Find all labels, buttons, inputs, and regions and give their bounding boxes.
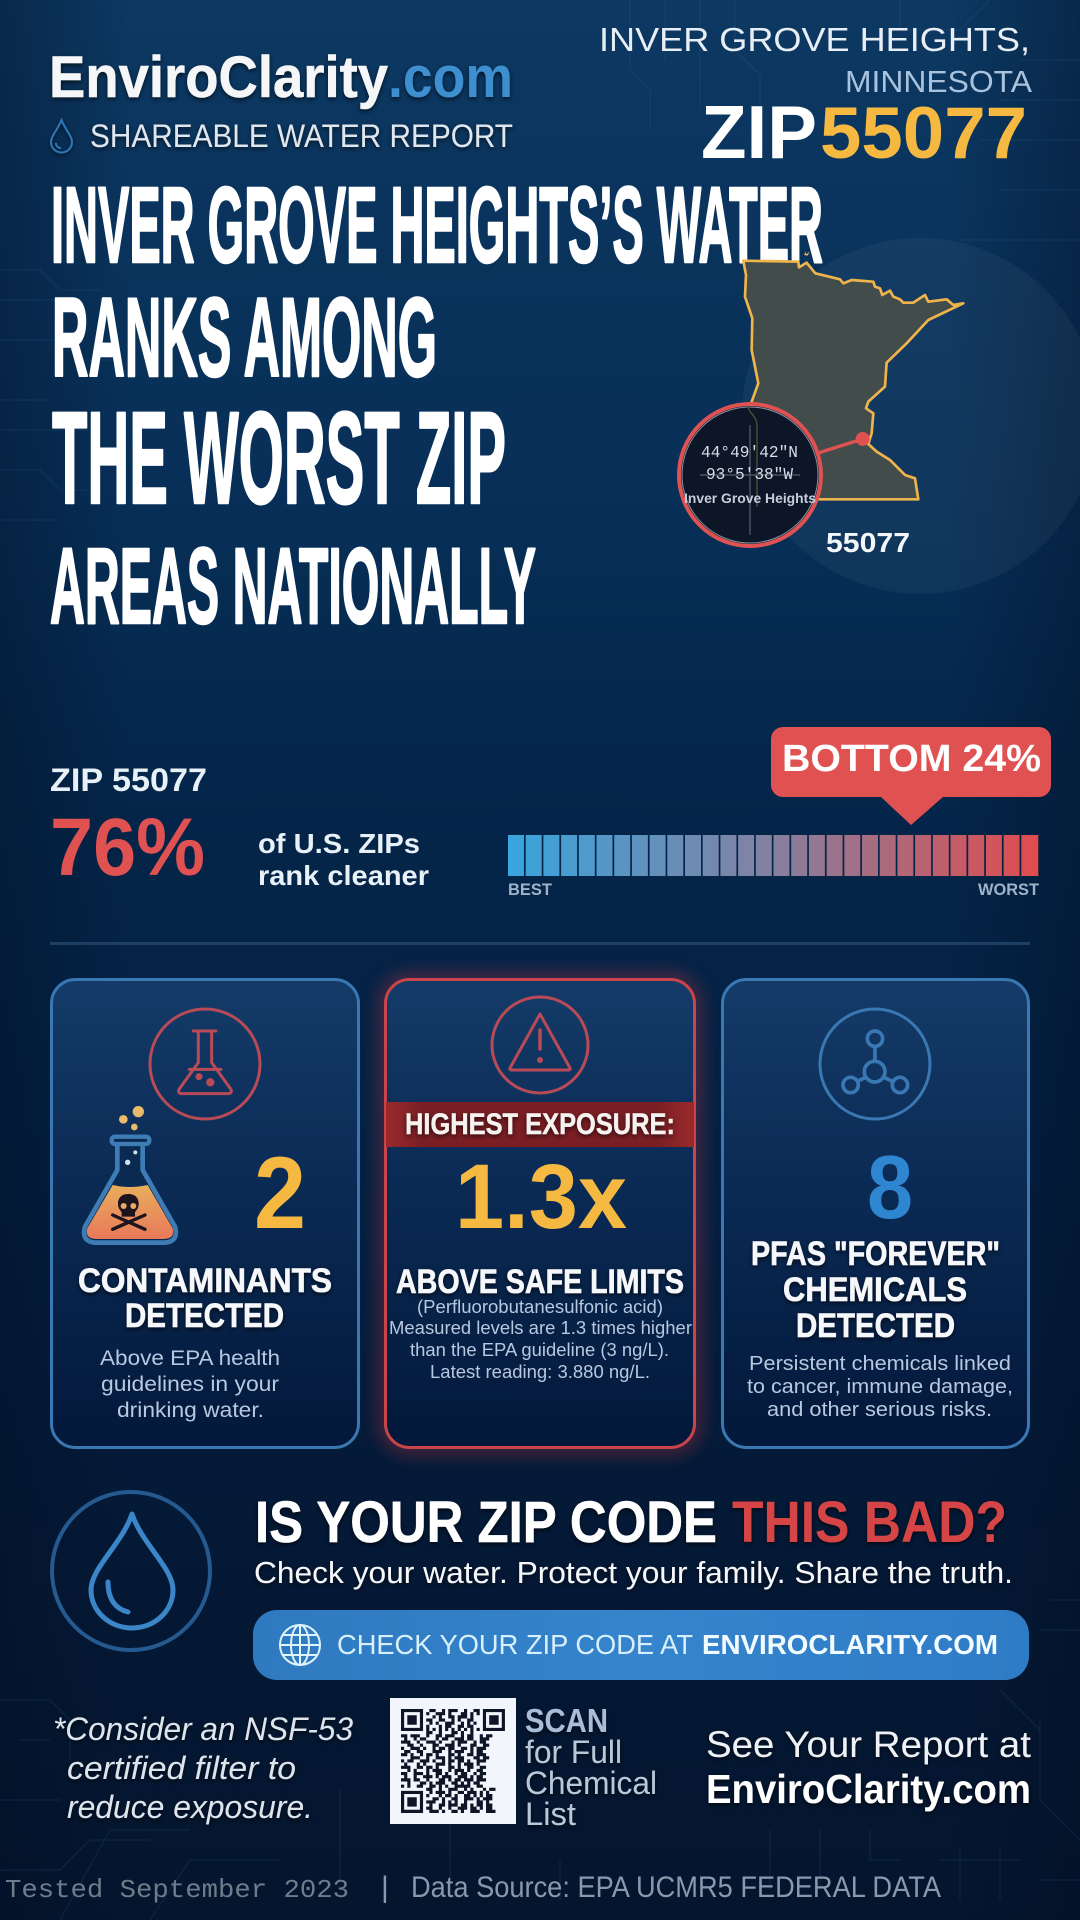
footer: Data Source: EPA UCMR5 FEDERAL DATA: [411, 1871, 941, 1904]
card description: Persistent chemicals linked: [749, 1352, 1011, 1375]
icon: molecule: [820, 1009, 930, 1119]
location inset: 93°5′38″W: [706, 466, 794, 485]
card heading: DETECTED: [125, 1297, 284, 1335]
headline: THE WORST ZIP: [52, 384, 506, 531]
rank stat: [50, 762, 429, 893]
icon: water drop: [51, 120, 72, 152]
report link: [706, 1724, 1032, 1812]
icon: toxic flask: [84, 1106, 176, 1243]
location inset: Inver Grove Heights: [684, 490, 816, 506]
footer: |: [381, 1871, 389, 1904]
panel: PFAS: [722, 980, 1028, 1448]
card description: drinking water.: [117, 1399, 264, 1422]
rank stat: ZIP 55077: [50, 762, 207, 798]
card description: [747, 1352, 1013, 1421]
ranking bar: WORST: [978, 880, 1040, 899]
filter note: reduce exposure.: [67, 1789, 313, 1825]
stat: 2: 2: [254, 1136, 306, 1250]
location header: MINNESOTA: [845, 64, 1032, 99]
logo: .com: [388, 45, 513, 110]
headline: RANKS AMONG: [52, 275, 437, 400]
location inset: [679, 404, 821, 546]
card heading: [78, 1262, 332, 1335]
scan label: SCAN: [525, 1702, 608, 1739]
scan label: for Full: [525, 1734, 622, 1770]
button: ENVIROCLARITY.COM: [702, 1629, 998, 1660]
filter note: certified filter to: [67, 1750, 296, 1786]
call to action heading: THIS BAD?: [732, 1490, 1007, 1555]
card description: [100, 1347, 280, 1422]
stat: 8: 8: [867, 1138, 913, 1238]
location header: ZIP: [701, 90, 817, 174]
card heading: CHEMICALS: [783, 1271, 967, 1309]
icon: warning: [492, 997, 588, 1093]
card description: than the EPA guideline (3 ng/L).: [410, 1340, 669, 1360]
card description: to cancer, immune damage,: [747, 1375, 1013, 1398]
connector line: [819, 439, 863, 453]
card heading: ABOVE SAFE LIMITS: [396, 1263, 684, 1301]
panel: contaminants: [52, 980, 358, 1448]
rank stat: 76%: [50, 802, 205, 893]
stat: 1.3x: 1.3x: [455, 1146, 627, 1248]
icon: flask in circle: [150, 1009, 260, 1119]
callout: bottom 24%: BOTTOM 24%: [782, 738, 1041, 780]
card description: Latest reading: 3.880 ng/L.: [430, 1362, 650, 1382]
ranking bar: BEST: [508, 880, 553, 899]
report link: See Your Report at: [706, 1724, 1032, 1765]
card description: guidelines in your: [101, 1373, 279, 1396]
rank stat: rank cleaner: [258, 860, 429, 891]
card heading: CONTAMINANTS: [78, 1262, 332, 1300]
location inset: 44°49′42″N: [701, 444, 798, 463]
report tagline: [51, 118, 513, 154]
tagline text: SHAREABLE WATER REPORT: [90, 118, 513, 154]
scan label: List: [525, 1796, 576, 1832]
location header: INVER GROVE HEIGHTS,: [599, 21, 1030, 58]
panel: highest exposure: [386, 980, 694, 1448]
ranking bar: [508, 835, 1040, 899]
filter note: [53, 1711, 353, 1825]
scan label: Chemical: [525, 1765, 657, 1801]
icon: globe: [280, 1625, 320, 1665]
call to action subheading: Check your water. Protect your family. Share the truth.: [254, 1555, 1013, 1590]
headline: [50, 164, 823, 646]
call to action heading: IS YOUR ZIP CODE: [255, 1490, 717, 1555]
map: Minnesota: [743, 252, 963, 499]
map zip label: 55077: [826, 527, 910, 558]
card heading: DETECTED: [796, 1307, 955, 1345]
card description: Measured levels are 1.3 times higher: [389, 1318, 692, 1338]
state outline: [743, 261, 963, 499]
callout: bottom 24%: [771, 727, 1051, 825]
location dot: [856, 432, 870, 446]
location header: 55077: [820, 93, 1027, 174]
footer: [5, 1871, 941, 1905]
icon: water drop in circle: [52, 1492, 210, 1650]
filter note: *Consider an NSF-53: [53, 1711, 353, 1747]
decorative circle behind map: [742, 238, 1080, 594]
card heading: [751, 1235, 1000, 1345]
footer: Tested September 2023: [5, 1875, 349, 1905]
QR code: [390, 1698, 516, 1824]
island mark: [804, 252, 810, 256]
card description: Above EPA health: [100, 1347, 280, 1370]
location header: [599, 21, 1032, 174]
card heading: PFAS "FOREVER": [751, 1235, 1000, 1273]
button: [253, 1610, 1029, 1680]
card description: [389, 1297, 692, 1382]
scan label: [525, 1702, 657, 1832]
card description: and other serious risks.: [767, 1398, 992, 1421]
banner: HIGHEST EXPOSURE:: [405, 1108, 675, 1141]
logo: EnviroClarity: [49, 45, 388, 110]
card description: (Perfluorobutanesulfonic acid): [417, 1297, 663, 1317]
button: CHECK YOUR ZIP CODE AT: [337, 1629, 693, 1660]
report link: EnviroClarity.com: [706, 1766, 1031, 1812]
banner: [386, 1102, 694, 1147]
rank stat: of U.S. ZIPs: [258, 828, 420, 859]
